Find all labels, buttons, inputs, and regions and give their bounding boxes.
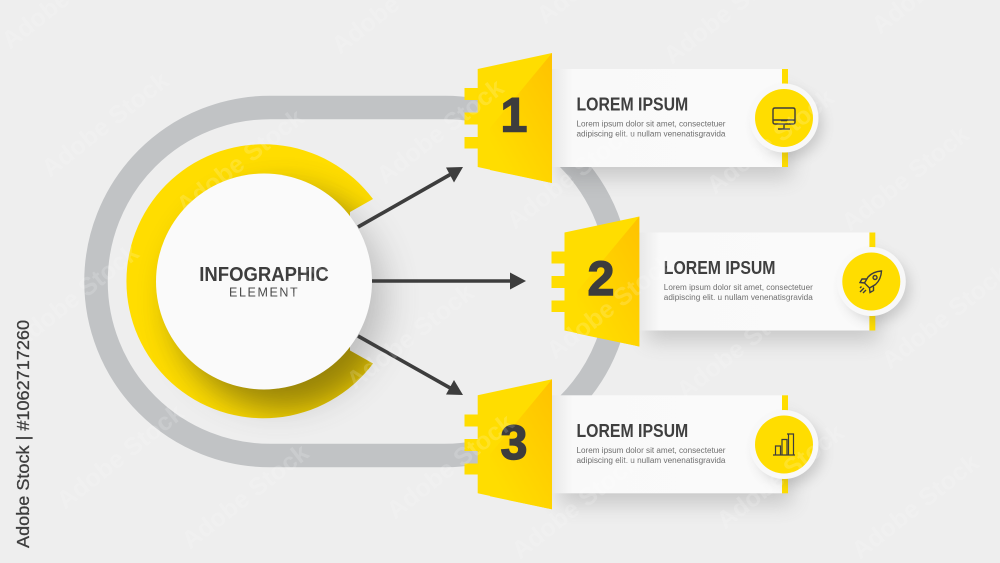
watermarks: Adobe Stock <box>176 439 314 555</box>
body text: adipiscing elit. u nullam venenatisgravida <box>576 130 726 138</box>
heading: LOREM IPSUM <box>664 257 776 278</box>
white card <box>552 395 782 493</box>
white card <box>552 69 782 167</box>
arrow: to step 1 <box>358 167 463 227</box>
watermarks: Adobe Stock <box>846 449 984 563</box>
watermarks: Adobe Stock <box>6 239 144 355</box>
watermarks: Adobe Stock <box>701 84 839 200</box>
watermarks: Adobe Stock <box>836 121 974 237</box>
number 2: 2 <box>588 253 614 306</box>
white card <box>639 232 869 330</box>
icon badge: monitor <box>750 84 823 158</box>
panel: step 2 <box>552 216 910 346</box>
watermarks: Adobe Stock <box>501 119 639 235</box>
body text: Lorem ipsum dolor sit amet, consectetuer <box>576 446 726 455</box>
connector teeth <box>552 252 565 312</box>
yellow tab <box>478 379 552 509</box>
watermarks: Adobe Stock <box>171 104 309 220</box>
body text: adipiscing elit. u nullam venenatisgravida <box>664 293 813 302</box>
title: infographic: INFOGRAPHIC <box>199 263 329 286</box>
grey stadium track <box>96 108 619 456</box>
tab fold <box>577 216 639 346</box>
watermarks: Adobe Stock <box>36 67 174 183</box>
heading: LOREM IPSUM <box>576 420 688 441</box>
tab fold <box>490 53 552 183</box>
card shadow <box>647 256 879 342</box>
yellow tab <box>564 216 639 346</box>
central circle shadow on background <box>172 192 384 404</box>
body text: Lorem ipsum dolor sit amet, consectetuer <box>664 283 813 292</box>
watermarks: Adobe Stock <box>671 289 809 405</box>
number 3: 3 <box>501 417 527 470</box>
yellow tab <box>478 53 552 183</box>
yellow ring <box>126 144 373 418</box>
watermarks: Adobe Stock <box>506 449 644 563</box>
panel: step 3 <box>464 379 823 509</box>
card shadow <box>560 92 792 178</box>
watermarks: Adobe Stock <box>51 399 189 515</box>
connector teeth <box>464 414 478 474</box>
stock id caption: Adobe Stock | #1062717260 <box>13 320 33 548</box>
icon badge: bar chart <box>750 410 823 484</box>
watermarks: Adobe Stock <box>371 74 509 190</box>
arrow: to step 2 <box>372 272 526 290</box>
connector teeth <box>464 88 478 148</box>
watermarks: Adobe Stock <box>341 279 479 395</box>
number 1: 1 <box>501 90 527 143</box>
arrow: to step 3 <box>358 336 463 395</box>
panel: step 1 <box>464 53 823 183</box>
body text: Lorem ipsum dolor sit amet, consectetuer <box>576 120 726 128</box>
subtitle: element: ELEMENT <box>229 286 298 300</box>
accent bar <box>869 232 875 330</box>
watermarks: Adobe Stock <box>541 249 679 365</box>
watermarks: Adobe Stock <box>208 241 346 357</box>
watermarks: Adobe Stock <box>381 409 519 525</box>
central circle shadow on ring <box>182 198 394 410</box>
tab fold <box>490 379 552 509</box>
body text: adipiscing elit. u nullam venenatisgravida <box>576 456 726 465</box>
icon badge: rocket <box>837 247 910 322</box>
central circle <box>156 174 372 390</box>
accent bar <box>782 69 788 167</box>
heading: LOREM IPSUM <box>576 94 688 115</box>
accent bar <box>782 395 788 493</box>
card shadow <box>560 418 792 504</box>
watermarks: Adobe Stock <box>711 419 849 535</box>
